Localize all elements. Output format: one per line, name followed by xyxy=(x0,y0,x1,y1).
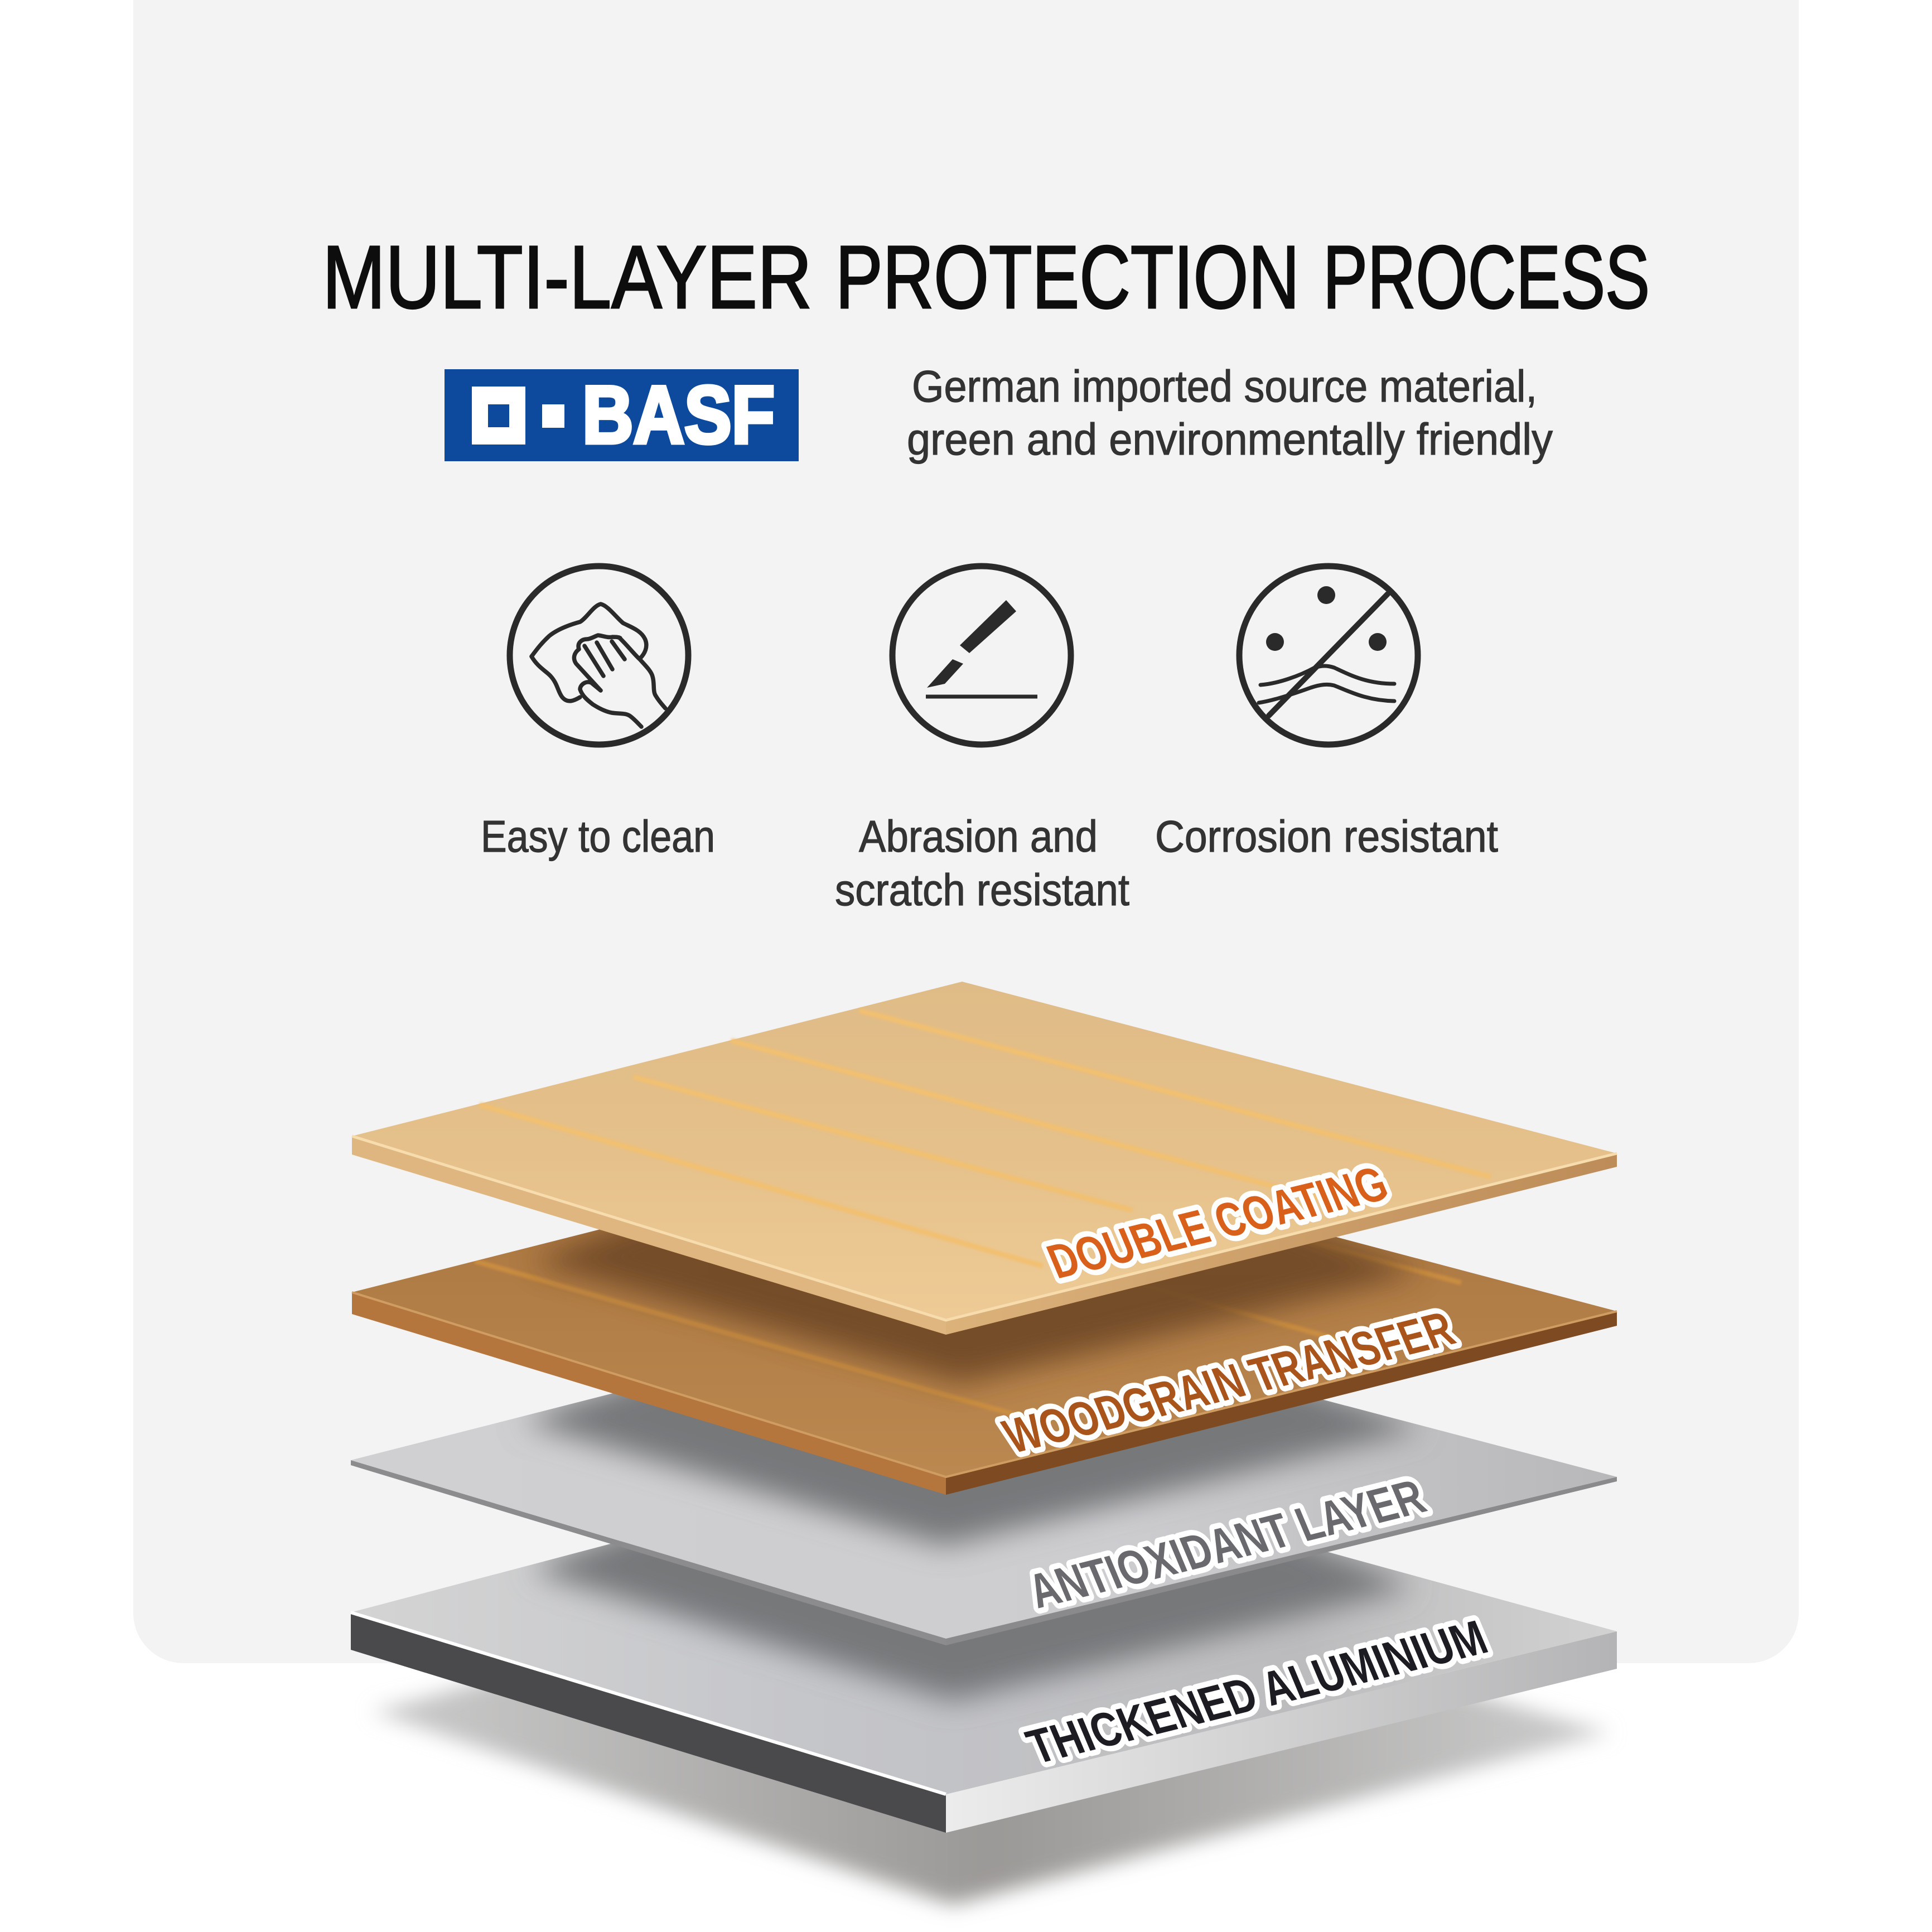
icon: scratch resistant blade xyxy=(892,566,1071,745)
ground shadow xyxy=(372,1551,1610,1905)
text block: source material: green and environmentally friendly xyxy=(907,414,1553,464)
text: double coating: DOUBLE COATING xyxy=(1040,1157,1396,1289)
text: antioxidant layer: ANTIOXIDANT LAYER xyxy=(1020,1470,1433,1619)
title: PROTECTION xyxy=(835,227,1300,327)
text block: source material: German imported source material, xyxy=(912,361,1537,411)
title: PROCESS xyxy=(1323,227,1650,327)
layer: double coating xyxy=(352,982,1617,1335)
label: easy to clean: Easy to clean xyxy=(481,812,715,861)
BASF logo xyxy=(445,369,799,461)
label: corrosion resistant: Corrosion resistant xyxy=(1155,812,1498,861)
text block: source material xyxy=(907,361,1553,464)
label: abrasion and scratch resistant: scratch resistant xyxy=(835,865,1129,915)
label: abrasion and scratch resistant xyxy=(835,812,1129,915)
label: abrasion and scratch resistant: Abrasion and xyxy=(859,812,1098,861)
title xyxy=(322,227,1650,327)
BASF logo: BASF xyxy=(582,369,775,460)
title: MULTI-LAYER xyxy=(322,227,812,327)
icon: easy to clean hand xyxy=(510,566,688,745)
text: woodgrain transfer: WOODGRAIN TRANSFER xyxy=(996,1302,1462,1464)
layer: antioxidant xyxy=(351,1393,1617,1645)
panel: grey background xyxy=(133,0,1799,1663)
layer: woodgrain transfer xyxy=(351,1229,1617,1495)
text: thickened aluminium: THICKENED ALUMINIUM xyxy=(1019,1610,1495,1774)
icon: corrosion resistant xyxy=(1239,566,1418,745)
layer: thickened aluminium xyxy=(350,1541,1617,1833)
